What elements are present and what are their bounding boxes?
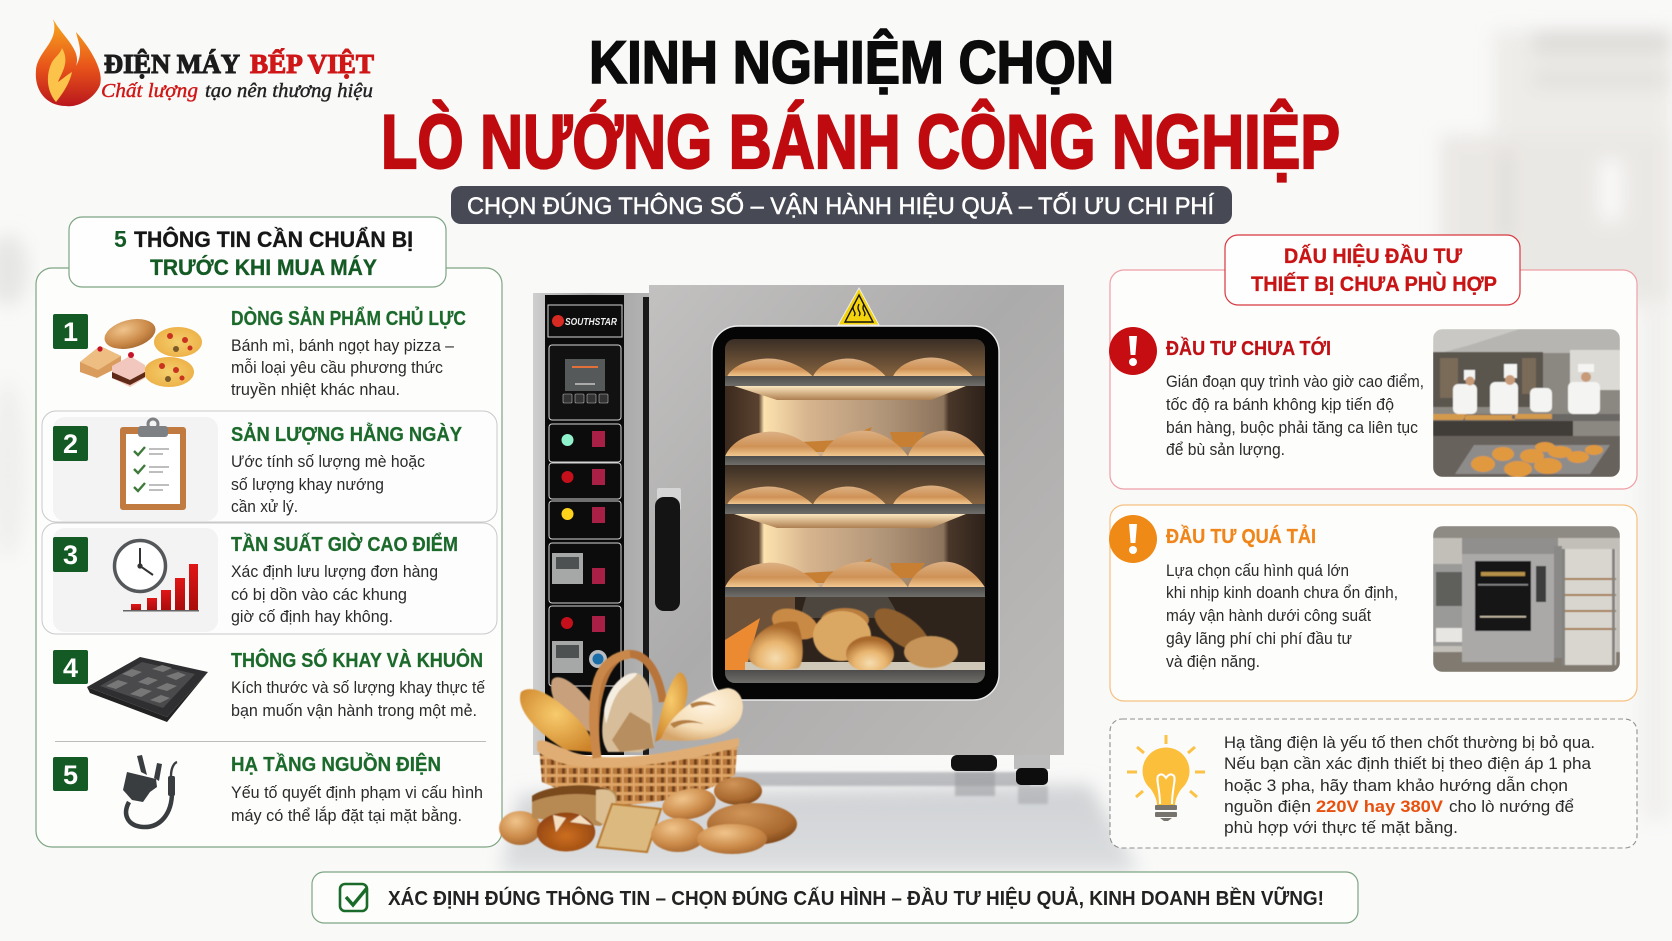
basket handle (back) xyxy=(595,654,663,755)
badge 3 xyxy=(53,537,88,572)
badge 2: 2 xyxy=(63,429,78,459)
oven xyxy=(533,285,1064,785)
banner text: XÁC ĐỊNH ĐÚNG THÔNG TIN – CHỌN ĐÚNG CẤU HÌNH – ĐẦU TƯ HIỆU QUẢ, KINH DOANH BỀN VỮNG! xyxy=(388,886,1324,910)
text 5: Yếu tố quyết định phạm vi cấu hình xyxy=(231,783,483,802)
text: under-investment xyxy=(1166,372,1424,459)
floor xyxy=(500,772,1140,872)
right panel: warning signs xyxy=(1109,270,1637,848)
bottom banner xyxy=(312,872,1358,923)
icon: power plug xyxy=(123,755,177,827)
text 1: mỗi loại yêu cầu phương thức xyxy=(231,358,443,377)
text 4: bạn muốn vận hành trong một mẻ. xyxy=(231,701,477,720)
pile of loaves xyxy=(499,777,797,854)
icon: clipboard xyxy=(120,419,186,510)
loaves on bottom shelf xyxy=(748,607,959,670)
basket handle (front) xyxy=(593,654,630,758)
text 4 xyxy=(231,678,485,720)
text: over-investment xyxy=(1166,561,1398,671)
heading 1: DÒNG SẢN PHẨM CHỦ LỰC xyxy=(231,306,466,330)
tagline: Chất lượng xyxy=(101,80,198,102)
badge 5 xyxy=(53,757,88,791)
heading 2: SẢN LƯỢNG HẰNG NGÀY xyxy=(231,422,463,446)
hot surface warning xyxy=(838,288,879,325)
oven door body xyxy=(649,285,1064,755)
item 1 xyxy=(53,306,466,399)
tip text: phù hợp với thực tế mặt bằng. xyxy=(1224,818,1458,837)
tip text: hoặc 3 pha, hãy tham khảo hướng dẫn chọn xyxy=(1224,776,1568,795)
text 2: cần xử lý. xyxy=(231,497,298,516)
text 3: Xác định lưu lượng đơn hàng xyxy=(231,562,438,581)
badge 1: 1 xyxy=(63,317,78,347)
brand name: ĐIỆN MÁY xyxy=(104,49,240,79)
left panel header: THÔNG TIN CẦN CHUẨN BỊ xyxy=(134,227,413,252)
text 2 xyxy=(231,452,425,516)
photo: oversized deck oven xyxy=(1433,526,1620,672)
text: over-investment: Lựa chọn cấu hình quá lớn xyxy=(1166,561,1349,580)
oven control column: SOUTHSTAR xyxy=(565,317,618,328)
oven feet xyxy=(951,755,1050,785)
left panel header: 5 xyxy=(114,226,127,252)
right panel header: DẤU HIỆU ĐẦU TƯ xyxy=(1284,244,1463,268)
heading 5: HẠ TẦNG NGUỒN ĐIỆN xyxy=(231,752,441,776)
tagline xyxy=(101,80,373,102)
text 3: giờ cố định hay không. xyxy=(231,607,393,626)
title line 1: KINH NGHIỆM CHỌN xyxy=(589,29,1114,96)
logo xyxy=(36,19,374,106)
tip box xyxy=(1110,719,1637,848)
row 3 card xyxy=(42,523,497,634)
tip text: 220V hay 380V xyxy=(1316,797,1444,816)
heading 4: THÔNG SỐ KHAY VÀ KHUÔN xyxy=(231,648,483,672)
text 1 xyxy=(231,336,455,399)
card: under-investment xyxy=(1109,270,1637,489)
text 3 xyxy=(231,562,438,626)
text 5: máy có thể lắp đặt tại mặt bằng. xyxy=(231,806,462,825)
door handle xyxy=(655,488,681,611)
brand name xyxy=(104,48,374,79)
tip text: Nếu bạn cần xác định thiết bị theo điện áp 1 pha xyxy=(1224,754,1592,773)
photo: busy bakery kitchen xyxy=(1433,329,1620,477)
icon: checkmark xyxy=(340,884,367,911)
icon: baking tray xyxy=(87,657,208,722)
croissants xyxy=(727,358,813,377)
badge 4 xyxy=(53,650,88,684)
item 3 xyxy=(53,532,458,626)
icon: clock and bars xyxy=(114,540,199,612)
heading 3: TẦN SUẤT GIỜ CAO ĐIỂM xyxy=(231,532,458,556)
badge 1 xyxy=(53,314,88,349)
loaves in basket xyxy=(520,672,743,752)
icon: red alert xyxy=(1109,327,1157,375)
text: over-investment: gây lãng phí chi phí đầu tư xyxy=(1166,629,1352,648)
text: over-investment: và điện năng. xyxy=(1166,652,1260,671)
left panel header: TRƯỚC KHI MUA MÁY xyxy=(150,255,377,280)
icon: breads and pizzas xyxy=(80,314,202,387)
shelves xyxy=(725,376,985,386)
tip text: nguồn điện xyxy=(1224,797,1311,816)
tagline: tạo nên thương hiệu xyxy=(205,80,373,102)
panel: 5 things to prepare xyxy=(36,268,502,847)
text 1: truyền nhiệt khác nhau. xyxy=(231,380,400,399)
badge 5: 5 xyxy=(63,760,78,790)
basket body xyxy=(539,738,738,805)
tip text: Hạ tầng điện là yếu tố then chốt thường bị bỏ qua. xyxy=(1224,733,1595,752)
tip text xyxy=(1224,733,1595,837)
subtitle pill xyxy=(451,186,1232,224)
right panel header xyxy=(1225,235,1520,305)
card: over-investment xyxy=(1109,505,1637,701)
badge 4: 4 xyxy=(63,653,78,683)
text 5 xyxy=(231,783,483,825)
tip text: cho lò nướng để xyxy=(1449,797,1574,816)
text 4: Kích thước và số lượng khay thực tế xyxy=(231,678,485,697)
icon: orange alert xyxy=(1109,515,1157,563)
text: under-investment: Gián đoạn quy trình vào giờ cao điểm, xyxy=(1166,372,1424,391)
badge 3: 3 xyxy=(63,540,78,570)
subtitle pill: CHỌN ĐÚNG THÔNG SỐ – VẬN HÀNH HIỆU QUẢ – TỐI ƯU CHI PHÍ xyxy=(467,191,1214,220)
heading: over-investment: ĐẦU TƯ QUÁ TẢI xyxy=(1166,525,1316,548)
text: over-investment: máy vận hành dưới công suất xyxy=(1166,606,1371,625)
icon: light bulb xyxy=(1127,735,1205,821)
item 5 xyxy=(53,752,483,827)
heading: under-investment: ĐẦU TƯ CHƯA TỚI xyxy=(1166,336,1331,360)
left panel header xyxy=(69,217,446,287)
text: under-investment: để bù sản lượng. xyxy=(1166,440,1285,459)
logo flame xyxy=(36,19,101,106)
text 3: có bị dồn vào các khung xyxy=(231,585,407,604)
brand name: BẾP VIỆT xyxy=(250,48,374,79)
item 2 xyxy=(53,419,463,516)
text: over-investment: khi nhịp kinh doanh chưa ổn định, xyxy=(1166,583,1398,602)
row 2 card xyxy=(42,411,497,522)
title line 2: LÒ NƯỚNG BÁNH CÔNG NGHIỆP xyxy=(381,99,1340,185)
oven control column xyxy=(533,293,649,755)
text 1: Bánh mì, bánh ngọt hay pizza – xyxy=(231,336,455,355)
text 2: Ước tính số lượng mè hoặc xyxy=(231,452,425,471)
text: under-investment: bán hàng, buộc phải tăng ca liên tục xyxy=(1166,418,1418,437)
text 2: số lượng khay nướng xyxy=(231,475,384,494)
bread basket xyxy=(499,654,797,854)
badge 2 xyxy=(53,426,88,461)
text: under-investment: tốc độ ra bánh không kịp tiến độ xyxy=(1166,395,1394,414)
right panel header: THIẾT BỊ CHƯA PHÙ HỢP xyxy=(1251,272,1497,296)
oven window xyxy=(712,326,999,700)
item 4 xyxy=(53,648,485,722)
